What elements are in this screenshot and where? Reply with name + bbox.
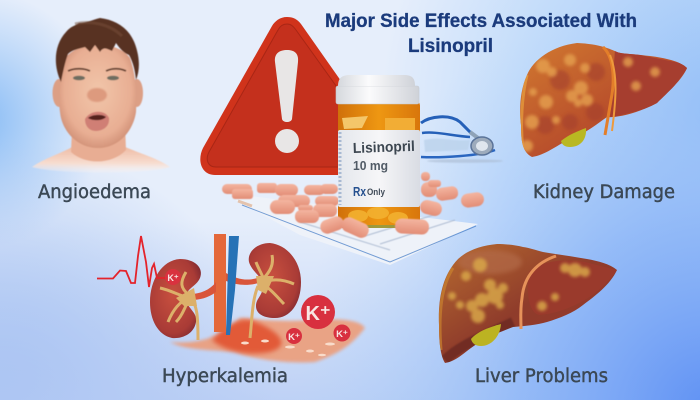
- potassium ions: K⁺: [336, 329, 348, 340]
- gallbladder: [561, 128, 586, 147]
- potassium ions: [165, 269, 350, 344]
- label: Liver Problems: Liver Problems: [475, 366, 608, 387]
- left kidney pelvis: [160, 272, 198, 340]
- tablets inside bottle: [348, 207, 408, 224]
- label: Angioedema: Angioedema: [38, 182, 151, 203]
- title: Lisinopril: [408, 35, 493, 57]
- heartbeat line: [97, 236, 168, 287]
- renal artery: [190, 282, 216, 300]
- label: Kidney Damage: Kidney Damage: [533, 182, 675, 203]
- right lobe: [528, 260, 617, 315]
- potassium ions: K⁺: [288, 332, 300, 343]
- ligament: [603, 47, 613, 135]
- medicine bottle: Rx: [353, 184, 367, 199]
- title: [325, 10, 637, 57]
- label: Hyperkalemia: Hyperkalemia: [162, 366, 288, 387]
- right kidney pelvis: [250, 255, 294, 338]
- medicine bottle: Lisinopril: [353, 139, 415, 157]
- aorta: [214, 234, 226, 332]
- illustration: top right liver: [520, 43, 690, 157]
- pills: [222, 172, 485, 223]
- icon: warning triangle: [200, 17, 400, 175]
- medicine bottle: Only: [367, 187, 385, 197]
- stethoscope: [421, 117, 503, 163]
- exclamation mark: [275, 50, 298, 122]
- ears: [52, 79, 66, 107]
- vena cava: [226, 236, 239, 335]
- fluid puddle: [170, 318, 365, 363]
- illustration: kidneys with hyperkalemia: [97, 234, 365, 363]
- prescription paper: [235, 196, 478, 265]
- medicine bottle: 10 mg: [353, 159, 388, 173]
- gallbladder: [471, 324, 501, 346]
- potassium ions: K⁺: [306, 303, 330, 325]
- hair: [56, 18, 139, 82]
- upper highlight: [458, 250, 522, 274]
- illustration: angioedema patient: [32, 18, 170, 173]
- shoulders: [32, 145, 170, 173]
- pills in front of bottle: [318, 199, 443, 240]
- face: [59, 45, 136, 148]
- amber bottle body: [338, 100, 420, 228]
- neck: [71, 125, 126, 162]
- medicine bottle: [336, 75, 420, 228]
- potassium ions: K⁺: [167, 273, 179, 283]
- right lobe shading: [610, 50, 690, 118]
- nose: [87, 88, 107, 102]
- mouth: [85, 112, 109, 131]
- ligament: [521, 256, 556, 329]
- title: Major Side Effects Associated With: [325, 10, 637, 32]
- brows: [68, 69, 126, 71]
- dark mottling: [536, 63, 605, 134]
- illustration: bottom right liver: [439, 244, 617, 363]
- bottle cap: [336, 86, 419, 104]
- right kidney: [249, 243, 301, 318]
- left kidney: [150, 259, 201, 338]
- eyes: [73, 76, 85, 80]
- label: [338, 130, 420, 207]
